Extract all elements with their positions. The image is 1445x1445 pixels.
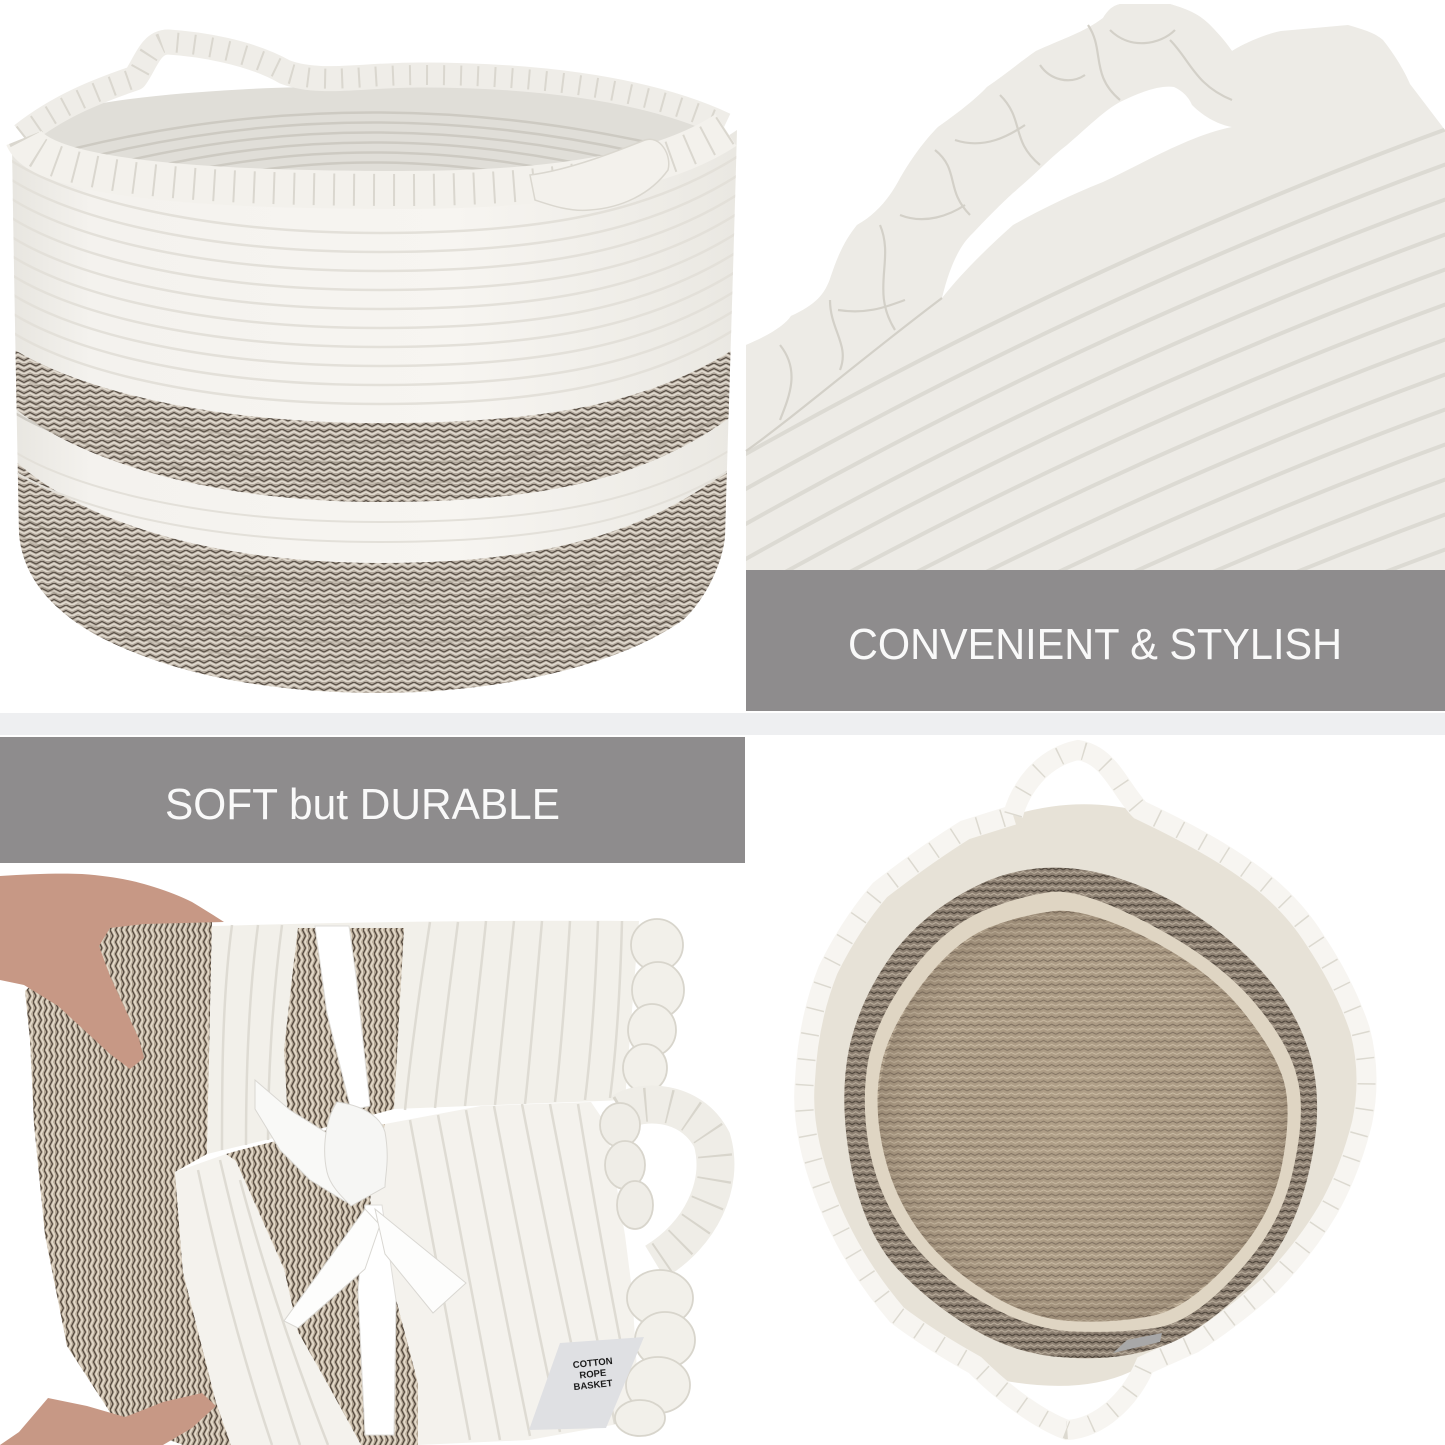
front basket brown wedge — [226, 1124, 418, 1445]
braid seams — [746, 25, 1232, 451]
handle ring braid marks — [622, 1105, 715, 1262]
hand: bottom — [0, 1393, 216, 1445]
rope rings: cream section — [0, 153, 740, 404]
inner handle braid — [600, 1103, 653, 1229]
front basket ribs — [198, 1104, 630, 1445]
basket inner wall — [44, 87, 695, 171]
woven surface and rim silhouette — [746, 4, 1445, 570]
caption bar: convenient and stylish — [746, 570, 1445, 711]
front basket cream right — [370, 1102, 640, 1445]
handle body covering the ropes — [700, 0, 1260, 500]
front basket cream left — [175, 1154, 361, 1445]
gap under the handle — [942, 87, 1232, 298]
front rim braid — [24, 130, 726, 190]
divider band — [0, 713, 1445, 735]
small metal tag — [1113, 1333, 1162, 1353]
rope rings: brown section — [0, 363, 740, 663]
rope rim and handles — [804, 750, 1367, 1430]
back basket cream fold — [207, 921, 639, 1154]
upper brown stripe — [0, 340, 740, 502]
panel: basket side view — [0, 42, 760, 720]
rope rings: cream stripe — [18, 451, 728, 543]
lower brown stripe — [18, 463, 727, 693]
rope twist marks — [804, 750, 1367, 1430]
front handle stub — [530, 139, 669, 210]
panel: folded baskets with ribbon — [0, 874, 715, 1445]
hand: top — [0, 874, 224, 1069]
front basket handle ring — [622, 1105, 715, 1262]
back basket brown stripe — [284, 928, 404, 1132]
ribbon: upper strip — [315, 926, 370, 1110]
back basket fold ribs — [222, 921, 622, 1150]
basket body — [12, 130, 737, 693]
back rim and handle — [22, 42, 725, 135]
cream ring — [865, 892, 1301, 1332]
caption bar: soft but durable — [0, 737, 745, 863]
ribbon: lower strip and bow — [255, 1080, 466, 1435]
tag text: ROPE — [579, 1368, 607, 1381]
product tag — [529, 1337, 644, 1430]
front basket lower braid — [615, 1270, 695, 1436]
back basket braid — [623, 919, 684, 1092]
panel: top view of basket — [804, 750, 1367, 1430]
panel: close-up of handle — [746, 4, 1445, 570]
tag text: BASKET — [573, 1378, 613, 1393]
tan floor — [877, 911, 1288, 1322]
basket interior wall — [804, 804, 1367, 1386]
brown ring — [844, 868, 1317, 1358]
floor shading — [878, 905, 1290, 1325]
caption text: CONVENIENT & STYLISH — [848, 620, 1342, 669]
back basket brown end — [25, 922, 231, 1445]
caption text: SOFT but DURABLE — [165, 780, 560, 829]
tag text: COTTON — [572, 1356, 613, 1371]
